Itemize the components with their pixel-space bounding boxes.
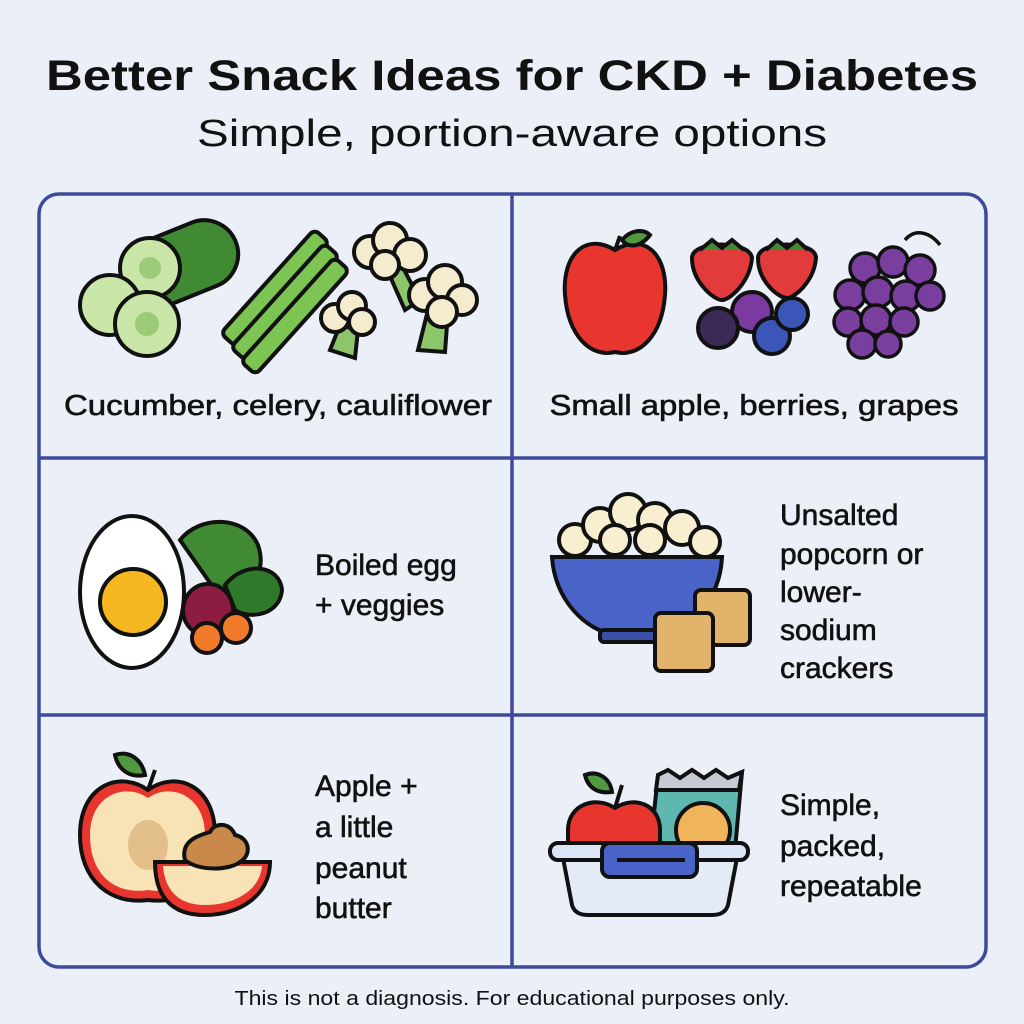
footer disclaimer: This is not a diagnosis. For educational purposes only. <box>234 988 790 1010</box>
label: + veggies <box>315 589 444 622</box>
icon: cucumber <box>80 210 248 356</box>
icon: egg with veggies <box>80 516 282 668</box>
subtitle: Simple, portion-aware options <box>197 113 827 155</box>
label: packed, <box>780 830 885 863</box>
label: Unsalted <box>780 499 898 532</box>
label: Apple + <box>315 770 418 803</box>
label: popcorn or <box>780 538 923 571</box>
icon: apple half and slice <box>80 754 270 915</box>
label: repeatable <box>780 870 922 903</box>
label: lower- <box>780 576 862 609</box>
panel grid <box>39 194 986 967</box>
label: a little <box>315 811 393 844</box>
label: sodium <box>780 614 877 647</box>
icon: popcorn bowl <box>552 494 750 671</box>
icon: lunch box <box>550 770 748 915</box>
panel: packed lunch <box>550 770 922 915</box>
panel: apple with peanut butter <box>80 754 418 925</box>
panel: vegetables <box>64 210 492 422</box>
label: Boiled egg <box>315 549 457 582</box>
icon: berries <box>692 240 816 354</box>
title: Better Snack Ideas for CKD + Diabetes <box>46 52 978 100</box>
label: butter <box>315 892 392 925</box>
icon: grapes <box>834 233 944 358</box>
icon: apple <box>565 231 665 353</box>
panel: egg and veggies <box>80 516 457 668</box>
panel: fruits <box>550 231 958 422</box>
panel: popcorn and crackers <box>552 494 923 685</box>
label: peanut <box>315 852 407 885</box>
icon: celery <box>221 229 349 375</box>
label: crackers <box>780 652 893 685</box>
label: Simple, <box>780 789 880 822</box>
icon: cauliflower <box>321 223 477 358</box>
label: Cucumber, celery, cauliflower <box>64 390 492 422</box>
label: Small apple, berries, grapes <box>550 390 958 422</box>
